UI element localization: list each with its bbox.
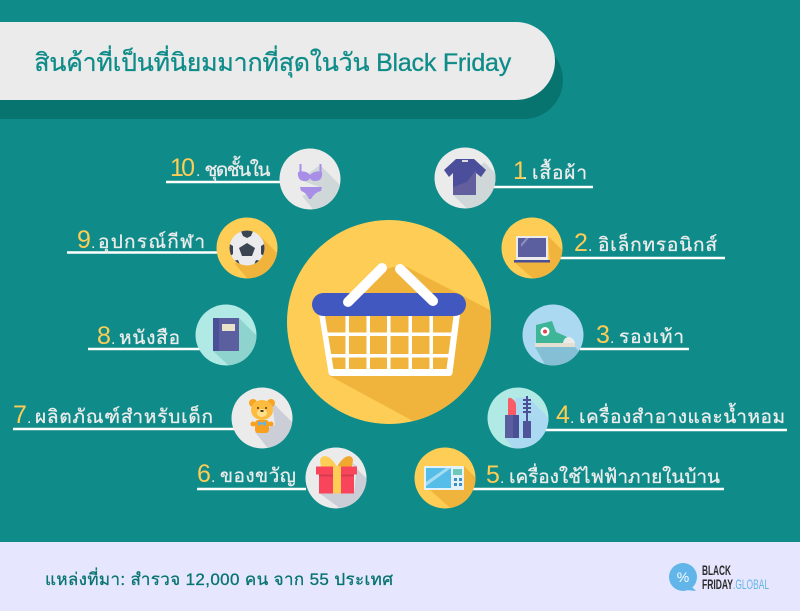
label 8: .: [111, 331, 115, 348]
item 1: clothes: [434, 148, 593, 208]
label 9: [77, 226, 205, 254]
label 4: .: [570, 410, 574, 427]
item 5: home appliances: [414, 448, 724, 508]
label 6: .: [211, 469, 215, 486]
item 6: gifts: [197, 448, 366, 508]
label 6: 6: [197, 460, 211, 488]
label 10: 10: [170, 154, 195, 182]
label 7: [13, 401, 213, 429]
label 1: เสื้อผ้า: [532, 159, 587, 184]
icon: microwave: [424, 466, 464, 490]
label 2: 2: [574, 229, 588, 257]
label 3: 3: [596, 321, 610, 349]
label 1: [513, 157, 587, 185]
label 8: 8: [97, 322, 111, 350]
icon: gift box: [316, 456, 357, 494]
item 4: cosmetics: [488, 388, 787, 448]
label 9: อุปกรณ์กีฬา: [98, 231, 205, 254]
icon: bikini: [298, 164, 322, 199]
header banner: [0, 22, 563, 119]
item 9: sports equipment: [67, 218, 278, 278]
label 2: อิเล็กทรอนิกส์: [598, 232, 717, 256]
label 3: [596, 321, 684, 349]
icon: soccer ball: [230, 230, 264, 266]
icon: t-shirt: [444, 159, 486, 195]
label 4: 4: [556, 401, 570, 429]
label 9: .: [91, 235, 95, 252]
source text: แหล่งที่มา: สำรวจ 12,000 คน จาก 55 ประเทศ: [45, 567, 393, 589]
label 4: เครื่องสำอางและน้ำหอม: [579, 403, 785, 428]
label 10: [170, 154, 270, 182]
icon: lipstick and mascara: [505, 396, 531, 438]
label 4: [556, 401, 785, 429]
label 2: [574, 229, 717, 257]
icon: book: [213, 318, 239, 351]
item 3: shoes: [522, 304, 689, 366]
item 2: electronics: [502, 218, 725, 278]
label 5: 5: [486, 461, 500, 489]
label 8: [97, 322, 180, 350]
label 9: 9: [77, 226, 91, 254]
icon: teddy bear: [249, 399, 275, 433]
icon: laptop: [514, 236, 550, 262]
label 2: .: [588, 238, 592, 255]
label 7: .: [27, 410, 31, 427]
title: สินค้าที่เป็นที่นิยมมากที่สุดในวัน Black Friday: [34, 45, 512, 78]
icon: sneaker: [535, 321, 575, 347]
label 3: รองเท้า: [619, 327, 684, 348]
label 3: .: [610, 330, 614, 347]
footer panel: [0, 542, 800, 611]
label 1: 1: [513, 157, 527, 185]
item 8: books: [88, 304, 256, 366]
logo: Black Friday Global: %: [677, 569, 689, 585]
item 7: kids products: [13, 388, 292, 448]
label 5: [486, 461, 720, 489]
logo: Black Friday Global: .GLOBAL: [733, 576, 769, 592]
label 5: เครื่องใช้ไฟฟ้าภายในบ้าน: [509, 463, 720, 488]
label 7: ผลิตภัณฑ์สำหรับเด็ก: [35, 404, 213, 428]
label 6: [197, 460, 296, 488]
logo: Black Friday Global: FRIDAY: [702, 576, 733, 592]
item 10: underwear: [166, 148, 340, 210]
label 8: หนังสือ: [119, 328, 180, 349]
label 1: .: [523, 166, 527, 183]
label 7: 7: [13, 401, 27, 429]
logo: Black Friday Global: BLACK: [702, 562, 731, 578]
label 10: .: [196, 163, 200, 180]
label 10: ชุดชั้นใน: [204, 156, 270, 182]
label 5: .: [500, 470, 504, 487]
label 6: ของขวัญ: [220, 466, 296, 487]
logo: Black Friday Global: [669, 562, 769, 592]
central basket icon: [287, 220, 491, 424]
